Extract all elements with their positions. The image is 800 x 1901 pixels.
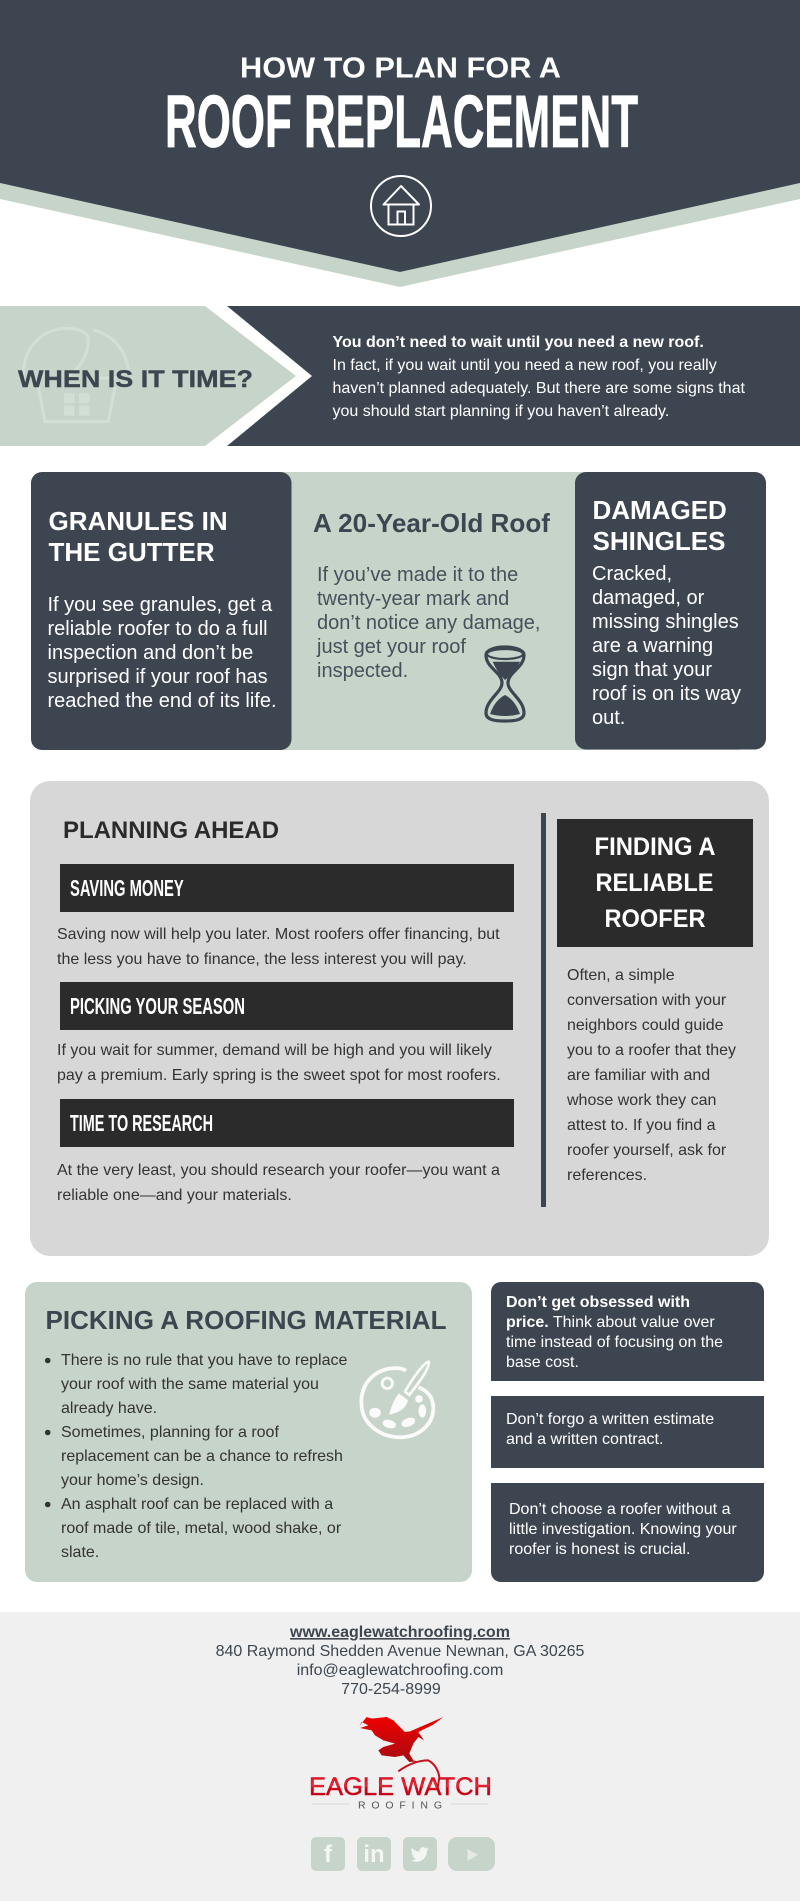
intro text: haven’t planned adequately. But there are some signs that: [332, 380, 745, 397]
card: a 20-year-old roof: [313, 508, 550, 721]
intro text: [332, 334, 745, 420]
bullet list: your roof with the same material you: [61, 1376, 319, 1393]
contact details: 770-254-8999: [341, 1681, 441, 1698]
logo: eagle watch roofing: EAGLE WATCH: [309, 1773, 492, 1801]
heading: planning ahead: PLANNING AHEAD: [63, 817, 279, 844]
callout: don't get obsessed with price: Don’t get obsessed with: [506, 1294, 690, 1311]
heading: when is it time: WHEN IS IT TIME?: [18, 366, 253, 393]
card: granules in the gutter: GRANULES IN: [48, 506, 228, 536]
sidebar: finding a reliable roofer: are familiar with and: [567, 1067, 710, 1084]
contact details: www.eaglewatchroofing.com: [289, 1624, 510, 1641]
card: granules in the gutter: surprised if your roof has: [48, 666, 268, 688]
sidebar: finding a reliable roofer: references.: [567, 1167, 647, 1184]
sidebar: finding a reliable roofer: [557, 819, 753, 1184]
card: granules in the gutter: THE GUTTER: [48, 537, 215, 567]
card: damaged shingles: missing shingles: [592, 611, 739, 633]
sub-block: picking your season: pay a premium. Early spring is the sweet spot for most roofers.: [57, 1067, 501, 1084]
card: a 20-year-old roof: don’t notice any damage,: [317, 612, 540, 634]
panel: picking a roofing material: [25, 1282, 472, 1582]
sub-block: time to research: TIME TO RESEARCH: [70, 1110, 213, 1136]
icon: faint house: [23, 328, 128, 422]
sub-block: time to research: At the very least, you should research your roofer—you want a: [57, 1162, 500, 1179]
callout: written estimate: and a written contract.: [506, 1431, 663, 1448]
callout: don't get obsessed with price: base cost.: [506, 1354, 579, 1371]
contact details: [216, 1624, 585, 1698]
card: damaged shingles: damaged, or: [592, 587, 705, 609]
card: damaged shingles: roof is on its way: [592, 683, 741, 705]
bullet list: There is no rule that you have to replace: [61, 1352, 347, 1369]
logo: eagle watch roofing: [309, 1717, 492, 1812]
callout: investigate roofer: Don’t choose a roofer without a: [509, 1501, 731, 1518]
sidebar: finding a reliable roofer: whose work they can: [566, 1092, 716, 1109]
icon: facebook: [311, 1837, 345, 1871]
bullet list: replacement can be a chance to refresh: [61, 1448, 343, 1465]
sub-block: saving money: Saving now will help you later. Most roofers offer financing, but: [57, 926, 500, 943]
sub-block: saving money: [57, 864, 514, 968]
card: granules in the gutter: reached the end of its life.: [48, 690, 277, 712]
sidebar: finding a reliable roofer: conversation with your: [567, 992, 727, 1009]
header banner: [0, 0, 800, 287]
card: damaged shingles: [575, 472, 766, 750]
card: a 20-year-old roof: If you’ve made it to the: [317, 564, 518, 586]
icon: twitter: [403, 1837, 437, 1871]
panel: when is it time: [0, 306, 800, 446]
callout: investigate roofer: roofer is honest is crucial.: [509, 1541, 690, 1558]
logo: eagle watch roofing: ROOFING: [358, 1800, 442, 1812]
card: damaged shingles: out.: [592, 707, 625, 729]
footer: [0, 1612, 800, 1901]
sidebar: finding a reliable roofer: FINDING A: [594, 833, 716, 861]
sidebar: finding a reliable roofer: neighbors could guide: [567, 1017, 724, 1034]
sub-block: picking your season: If you wait for summer, demand will be high and you will likely: [57, 1042, 492, 1059]
card: a 20-year-old roof: A 20-Year-Old Roof: [313, 508, 550, 538]
callout: don't get obsessed with price: price. Think about value over: [506, 1314, 715, 1331]
sidebar: finding a reliable roofer: RELIABLE: [596, 869, 714, 897]
card: damaged shingles: SHINGLES: [592, 526, 725, 556]
icon: hourglass: [486, 647, 524, 721]
card: a 20-year-old roof: inspected.: [317, 660, 408, 682]
sidebar: finding a reliable roofer: roofer yourself, ask for: [567, 1142, 727, 1159]
panel: planning ahead: [30, 781, 769, 1256]
card: damaged shingles: are a warning: [592, 635, 713, 657]
title: [165, 52, 638, 163]
bullet list: slate.: [61, 1544, 99, 1561]
icon: facebook: f: [324, 1841, 333, 1868]
contact details: info@eaglewatchroofing.com: [297, 1662, 503, 1679]
card: granules in the gutter: [31, 472, 292, 750]
bullet list: already have.: [61, 1400, 157, 1417]
callout: investigate roofer: [491, 1483, 764, 1582]
bullet list: Sometimes, planning for a roof: [61, 1424, 279, 1441]
sidebar: finding a reliable roofer: you to a roofer that they: [567, 1042, 736, 1059]
icon: house in circle: [371, 176, 431, 236]
bullet list: your home’s design.: [61, 1472, 204, 1489]
contact details: 840 Raymond Shedden Avenue Newnan, GA 30265: [216, 1643, 585, 1660]
panel: warning signs: [31, 472, 766, 750]
heading: picking a roofing material: PICKING A ROOFING MATERIAL: [46, 1305, 447, 1335]
card: a 20-year-old roof: just get your roof: [316, 636, 466, 658]
callout: investigate roofer: little investigation. Knowing your: [509, 1521, 737, 1538]
intro text: you should start planning if you haven’t already.: [332, 403, 669, 420]
sidebar: finding a reliable roofer: Often, a simple: [567, 967, 675, 984]
card: damaged shingles: sign that your: [592, 659, 712, 681]
icon: linkedin: [357, 1837, 391, 1871]
card: granules in the gutter: inspection and don’t be: [48, 642, 253, 664]
sub-block: time to research: reliable one—and your materials.: [57, 1187, 292, 1204]
bullet list: roof made of tile, metal, wood shake, or: [61, 1520, 342, 1537]
card: granules in the gutter: If you see granules, get a: [48, 594, 273, 616]
title: HOW TO PLAN FOR A: [240, 52, 561, 84]
callout: written estimate: [491, 1396, 764, 1468]
sub-block: picking your season: PICKING YOUR SEASON: [70, 993, 245, 1019]
intro text: You don’t need to wait until you need a new roof.: [332, 334, 704, 351]
callout: don't get obsessed with price: time instead of focusing on the: [506, 1334, 723, 1351]
icon: youtube: [448, 1837, 495, 1871]
sub-block: picking your season: [57, 982, 513, 1084]
bullet list: [45, 1352, 347, 1561]
callout: written estimate: Don’t forgo a written estimate: [506, 1411, 714, 1428]
icon: paint palette: [361, 1362, 433, 1437]
card: granules in the gutter: reliable roofer to do a full: [48, 618, 268, 640]
bullet list: An asphalt roof can be replaced with a: [61, 1496, 333, 1513]
sidebar: finding a reliable roofer: attest to. If you find a: [567, 1117, 716, 1134]
icon: linkedin: in: [363, 1841, 385, 1868]
card: damaged shingles: DAMAGED: [592, 495, 727, 525]
sidebar: finding a reliable roofer: ROOFER: [604, 905, 706, 933]
card: a 20-year-old roof: twenty-year mark and: [317, 588, 509, 610]
card: damaged shingles: Cracked,: [592, 563, 672, 585]
intro text: In fact, if you wait until you need a new roof, you really: [332, 357, 717, 374]
social icons: [311, 1837, 495, 1871]
sub-block: time to research: [57, 1099, 514, 1204]
callout: don't get obsessed with price: [491, 1282, 764, 1381]
sub-block: saving money: SAVING MONEY: [70, 875, 184, 901]
sub-block: saving money: the less you have to finance, the less interest you will pay.: [57, 951, 467, 968]
